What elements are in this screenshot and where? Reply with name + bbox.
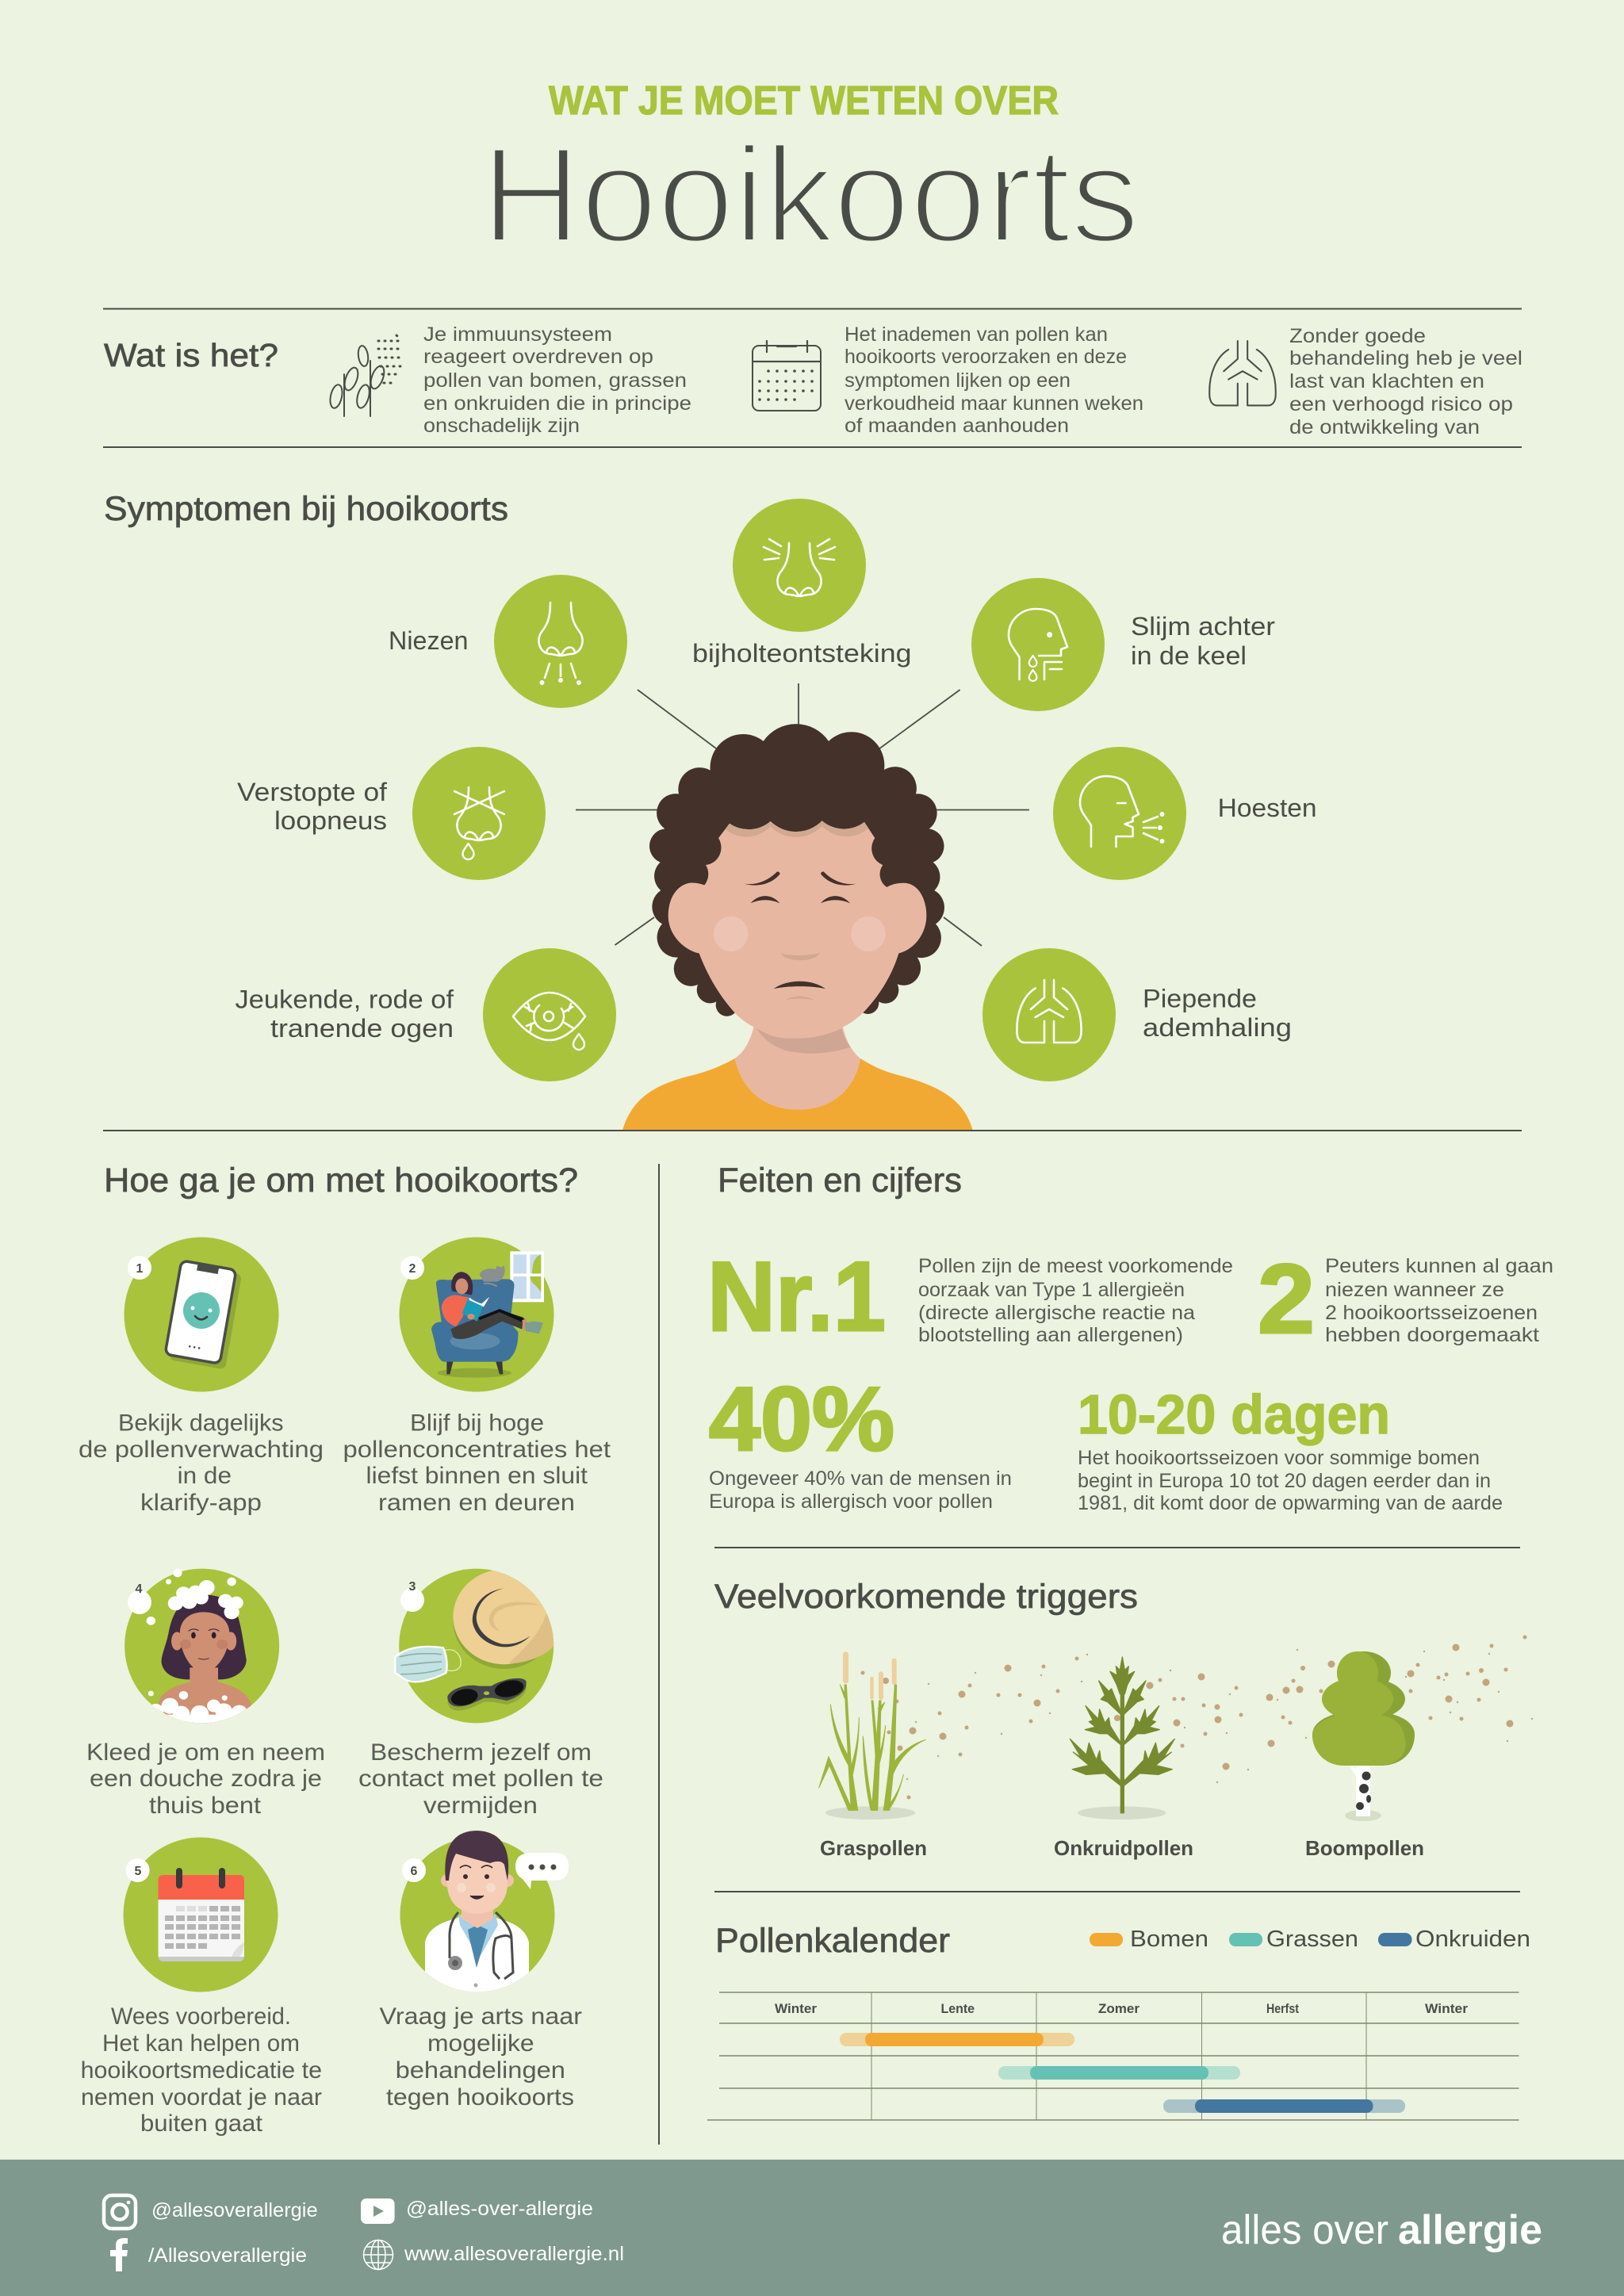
season headers <box>775 2001 1468 2016</box>
text: mogelijke <box>427 2030 534 2057</box>
heading: hoe ga je om met hooikoorts: Hoe ga je om met hooikoorts? <box>104 1161 578 1200</box>
fact text <box>1078 1447 1503 1514</box>
badge 1: 1 <box>136 1262 144 1276</box>
trigger: graspollen <box>819 1651 927 1860</box>
label: Boompollen <box>1305 1836 1424 1860</box>
legend: Onkruiden <box>1415 1927 1530 1952</box>
fact text: 1981, dit komt door de opwarming van de aarde <box>1078 1492 1503 1514</box>
connector lines <box>576 683 1029 946</box>
text: tegen hooikoorts <box>386 2084 574 2110</box>
big number: 10-20 dagen <box>1078 1383 1390 1445</box>
icon: calendar <box>124 1838 278 1992</box>
label <box>1131 612 1275 670</box>
fact text: Europa is allergisch voor pollen <box>709 1490 993 1513</box>
fact text: Ongeveer 40% van de mensen in <box>709 1468 1012 1490</box>
heading: wat is het: Wat is het? <box>104 337 278 373</box>
label: Verstopte of <box>237 778 387 806</box>
tip 1: app <box>79 1237 324 1516</box>
trigger: onkruidpollen <box>1054 1657 1193 1860</box>
fact text: 2 hooikoortsseizoenen <box>1325 1302 1538 1324</box>
text: symptomen <box>845 323 1143 437</box>
handle: instagram: @allesoverallergie <box>151 2199 318 2221</box>
badge 3 <box>400 1580 424 1612</box>
text: thuis bent <box>149 1793 262 1819</box>
fact text <box>918 1255 1233 1346</box>
icon: woman reading in armchair <box>400 1237 553 1392</box>
legend: Grassen <box>1266 1927 1358 1952</box>
text: immuunsysteem: Je immuunsysteem <box>423 323 612 346</box>
text: hooikoortsmedicatie te <box>81 2057 322 2084</box>
big number: 2 <box>1258 1245 1315 1354</box>
icon: blocked nose <box>412 747 546 880</box>
text: Wees voorbereid. <box>111 2003 291 2030</box>
badge 5: 5 <box>135 1865 142 1878</box>
text <box>81 2003 322 2137</box>
text <box>358 1739 603 1819</box>
text: behandelingen <box>396 2057 565 2084</box>
fact text: oorzaak van Type 1 allergieën <box>918 1279 1185 1301</box>
big number: Nr.1 <box>707 1242 886 1352</box>
text: symptomen: hooikoorts veroorzaken en deze <box>845 346 1127 368</box>
big number: 40% <box>709 1369 894 1470</box>
text: symptomen: of maanden aanhouden <box>845 415 1069 437</box>
legend <box>1090 1927 1530 1952</box>
icon: itchy eye <box>483 948 616 1081</box>
symptom: verstopte of loopneus <box>237 747 546 880</box>
label: loopneus <box>274 806 387 835</box>
badge 2: 2 <box>409 1262 416 1276</box>
text: buiten gaat <box>140 2110 263 2137</box>
icon: youtube <box>361 2198 395 2224</box>
handle: facebook: /Allesoverallergie <box>148 2244 307 2267</box>
shirt <box>622 1058 973 1131</box>
main title: Hooikoorts <box>481 119 1139 271</box>
illustration: grass <box>819 1651 925 1820</box>
icon: head with mucus <box>971 578 1105 711</box>
text: immuunsysteem <box>423 323 691 437</box>
tip 3: bescherm jezelf <box>358 1569 603 1819</box>
text: immuunsysteem: onschadelijk zijn <box>423 415 580 437</box>
icon: coughing head <box>1053 747 1186 880</box>
text: Bescherm jezelf om <box>370 1739 592 1766</box>
label: Jeukende, rode of <box>235 985 454 1013</box>
badge 6 <box>402 1858 426 1882</box>
illustration: birch tree <box>1312 1651 1415 1821</box>
title block <box>481 78 1139 271</box>
label: Niezen <box>389 626 468 655</box>
heading: symptomen: Symptomen bij hooikoorts <box>104 490 508 528</box>
fact: 40% <box>709 1369 1012 1513</box>
text <box>379 2003 582 2110</box>
badge 2 <box>400 1256 424 1280</box>
icon: instagram <box>104 2195 136 2229</box>
symptom: piepende ademhaling <box>982 948 1292 1081</box>
icon: sneezing nose <box>494 575 627 708</box>
text: Het kan helpen om <box>102 2030 300 2057</box>
chart: pollen calendar <box>707 1992 1519 2120</box>
text: nemen voordat je naar <box>81 2084 322 2110</box>
fact: 10-20 dagen <box>1078 1383 1503 1514</box>
heading: feiten en cijfers: Feiten en cijfers <box>718 1161 962 1200</box>
fact: nr 1 <box>707 1242 1233 1352</box>
season headers: Herfst <box>1266 2001 1299 2016</box>
text <box>86 1739 325 1819</box>
text: immuunsysteem: en onkruiden die in principe <box>423 392 691 415</box>
text: Blijf bij hoge <box>410 1410 544 1437</box>
symptom: hoesten <box>1053 747 1317 880</box>
tip 5: voorbereid <box>81 1838 322 2137</box>
face <box>668 821 926 1039</box>
text: immuunsysteem: reageert overdreven op <box>423 346 653 368</box>
label: ademhaling <box>1143 1013 1292 1042</box>
label <box>1143 985 1292 1042</box>
badge 4 <box>128 1582 151 1614</box>
bar: bomen <box>840 2033 1074 2046</box>
panel: wat is het <box>104 323 1522 438</box>
text: contact met pollen te <box>358 1766 603 1792</box>
neck shadow <box>755 1026 851 1054</box>
text: Vraag je arts naar <box>379 2003 582 2030</box>
text: behandeling: de ontwikkeling van <box>1289 416 1480 438</box>
label: Graspollen <box>820 1836 927 1860</box>
text: behandeling <box>1289 325 1522 438</box>
fact text: Het hooikoortsseizoen voor sommige bomen <box>1078 1447 1480 1469</box>
chart grid <box>707 1992 1519 2120</box>
illustration: weed <box>1070 1657 1174 1820</box>
label: tranende ogen <box>270 1014 454 1043</box>
bar: onkruiden <box>1163 2099 1405 2113</box>
fact text: niezen wanneer ze <box>1325 1279 1504 1301</box>
fact text <box>709 1468 1012 1513</box>
pollen particles <box>861 1635 1533 1800</box>
symptom: niezen <box>389 575 627 708</box>
icon: plant with pollen <box>328 335 402 416</box>
label: in de keel <box>1131 641 1247 670</box>
text <box>343 1410 611 1516</box>
badge 1 <box>128 1256 151 1280</box>
icon: calendar outline <box>753 341 821 411</box>
text: Bekijk dagelijks <box>118 1410 284 1437</box>
text: klarify-app <box>140 1490 262 1516</box>
text <box>79 1410 324 1516</box>
icon: lungs <box>982 948 1116 1081</box>
heading: pollenkalender: Pollenkalender <box>715 1922 950 1960</box>
overline heading: WAT JE MOET WETEN OVER <box>549 78 1059 123</box>
fact text: blootstelling aan allergenen) <box>918 1324 1183 1346</box>
label: Slijm achter <box>1131 612 1275 641</box>
text: behandeling: last van klachten en <box>1289 370 1484 392</box>
fact text: hebben doorgemaakt <box>1325 1324 1539 1346</box>
icon: phone <box>124 1237 279 1392</box>
label <box>235 985 454 1043</box>
fact text <box>1325 1255 1553 1346</box>
trigger: boompollen <box>1305 1651 1424 1860</box>
handle: youtube: @alles-over-allergie <box>406 2198 593 2220</box>
text: vermijden <box>423 1793 538 1819</box>
fact text: (directe allergische reactie na <box>918 1302 1195 1324</box>
fact text: Pollen zijn de meest voorkomende <box>918 1255 1233 1277</box>
text: symptomen: verkoudheid maar kunnen weken <box>845 392 1143 415</box>
fact text: Peuters kunnen al gaan <box>1325 1255 1553 1277</box>
text: behandeling: behandeling heb je veel <box>1289 347 1522 369</box>
badge 6: 6 <box>411 1865 418 1878</box>
text: een douche zodra je <box>90 1766 322 1792</box>
badge 5 <box>126 1858 150 1882</box>
icon: hat, mask and sunglasses <box>381 1569 557 1723</box>
text: symptomen: symptomen lijken op een <box>845 369 1071 392</box>
text: liefst binnen en sluit <box>366 1463 588 1489</box>
season headers: Lente <box>940 2001 975 2016</box>
text: ramen en deuren <box>378 1490 575 1516</box>
logo: allergie <box>1398 2207 1542 2253</box>
heading: veelvoorkomende triggers: Veelvoorkomende triggers <box>714 1578 1138 1616</box>
legend: Bomen <box>1130 1927 1208 1952</box>
symptom: jeukende ogen <box>235 948 616 1081</box>
logo <box>1221 2207 1542 2253</box>
tip 4: douche <box>86 1569 325 1819</box>
link: website: www.allesoverallergie.nl <box>404 2243 624 2265</box>
icon: sinus nose <box>733 499 866 632</box>
text: Kleed je om en neem <box>86 1739 325 1766</box>
logo: alles over <box>1221 2207 1388 2253</box>
text: in de <box>178 1463 232 1489</box>
icon: globe <box>363 2241 393 2269</box>
icon: lungs outline <box>1209 341 1276 405</box>
fact: 2 <box>1258 1245 1553 1354</box>
tip 2: binnen blijven <box>343 1237 611 1516</box>
label <box>237 778 387 835</box>
label: Hoesten <box>1218 794 1317 822</box>
symptom: bijholteontsteking <box>692 499 912 668</box>
text: immuunsysteem: pollen van bomen, grassen <box>423 369 687 392</box>
symptom: slijm achter in de keel <box>971 578 1275 711</box>
text: behandeling: een verhoogd risico op <box>1289 393 1513 415</box>
badge 3: 3 <box>409 1580 416 1594</box>
illustration: head with curly hair <box>622 724 973 1131</box>
icon: doctor <box>400 1831 569 1998</box>
footer <box>0 2160 1624 2296</box>
badge 4: 4 <box>136 1582 143 1596</box>
label: bijholteontsteking <box>692 639 912 668</box>
neck <box>735 1022 860 1110</box>
text: behandeling: Zonder goede <box>1289 325 1426 347</box>
season headers: Winter <box>775 2001 817 2016</box>
icon: facebook <box>110 2238 128 2271</box>
hair <box>649 724 944 1016</box>
season headers: Winter <box>1425 2001 1468 2016</box>
bar: grassen <box>998 2066 1240 2080</box>
label: Piepende <box>1143 985 1257 1013</box>
text: de pollenverwachting <box>79 1437 324 1463</box>
icon: woman with foam <box>124 1569 279 1725</box>
label: Onkruidpollen <box>1054 1836 1193 1860</box>
tip 6: arts <box>379 1831 582 2110</box>
season headers: Zomer <box>1098 2001 1139 2016</box>
fact text: begint in Europa 10 tot 20 dagen eerder dan in <box>1078 1470 1491 1492</box>
text: symptomen: Het inademen van pollen kan <box>845 323 1108 346</box>
text: pollenconcentraties het <box>343 1437 611 1463</box>
